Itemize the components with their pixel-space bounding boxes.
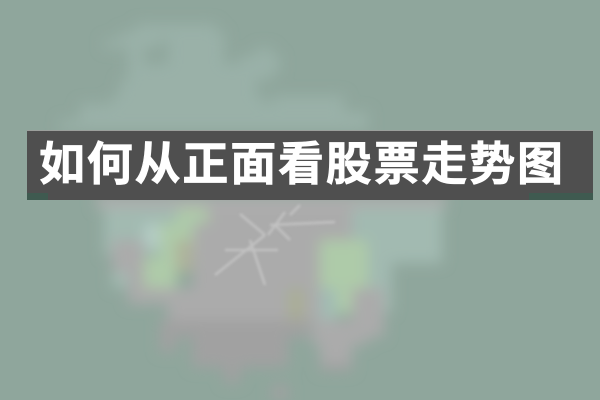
banner [27,130,593,200]
green leaves [144,208,368,313]
pale centre and teal accent patches [144,224,160,248]
title: 如何从正面看股票走势图 [39,138,565,190]
grey strip below banner [96,196,446,208]
darker lower flower body [160,320,352,400]
blurred colour masses [60,24,446,400]
left pale teal petal [104,208,442,312]
olive accents [176,240,192,272]
upper pale flower haze [60,24,368,130]
white flower stamens [215,205,335,285]
grey flower body [112,208,384,363]
